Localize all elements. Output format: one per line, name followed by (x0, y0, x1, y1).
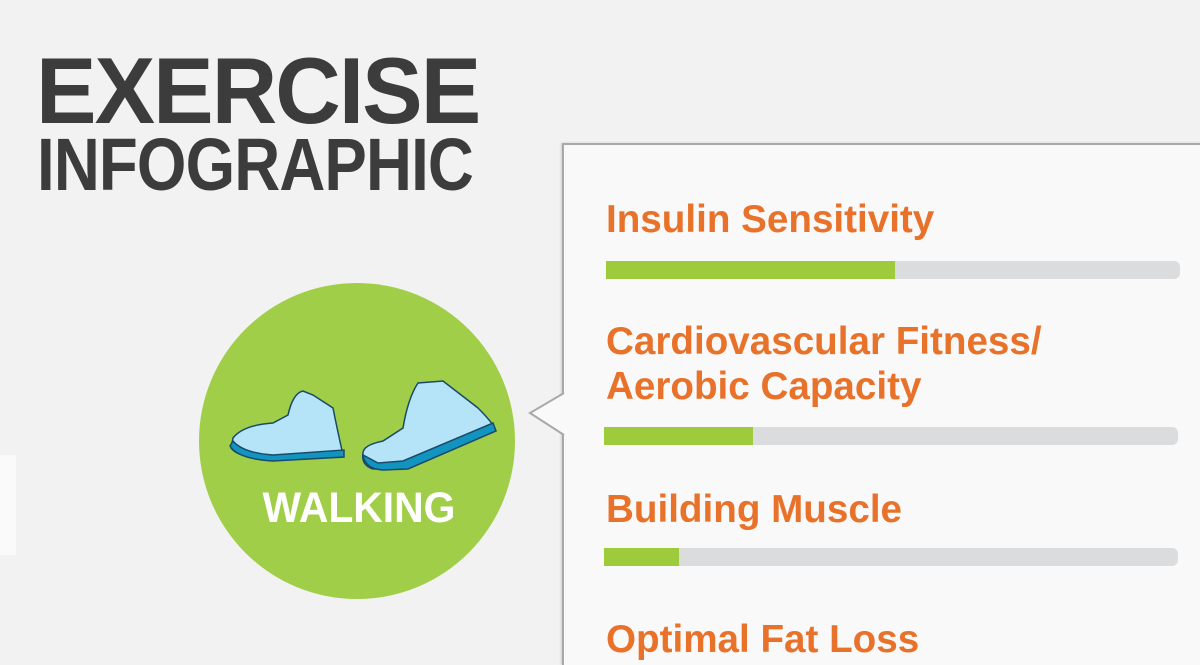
left decorative fragment (0, 455, 16, 555)
item: cardiovascular fitness (604, 320, 1178, 445)
icon: shoes (229, 380, 497, 471)
item: building muscle (604, 488, 1178, 566)
item: cardiovascular fitness: Cardiovascular Fitness/ (606, 320, 1042, 363)
title (36, 38, 479, 206)
item: insulin sensitivity (606, 198, 1180, 279)
pointer (528, 393, 564, 435)
label: WALKING: WALKING (263, 484, 455, 532)
title: INFOGRAPHIC (37, 123, 473, 206)
item: insulin sensitivity: Insulin Sensitivity (606, 198, 934, 241)
panel: benefits (562, 143, 1200, 665)
item: building muscle: Building Muscle (606, 488, 902, 531)
item: optimal fat loss (cut off): Optimal Fat Loss (606, 618, 919, 661)
walking circle (199, 283, 515, 599)
item: cardiovascular fitness: Aerobic Capacity (606, 365, 921, 408)
title: EXERCISE (36, 38, 479, 143)
